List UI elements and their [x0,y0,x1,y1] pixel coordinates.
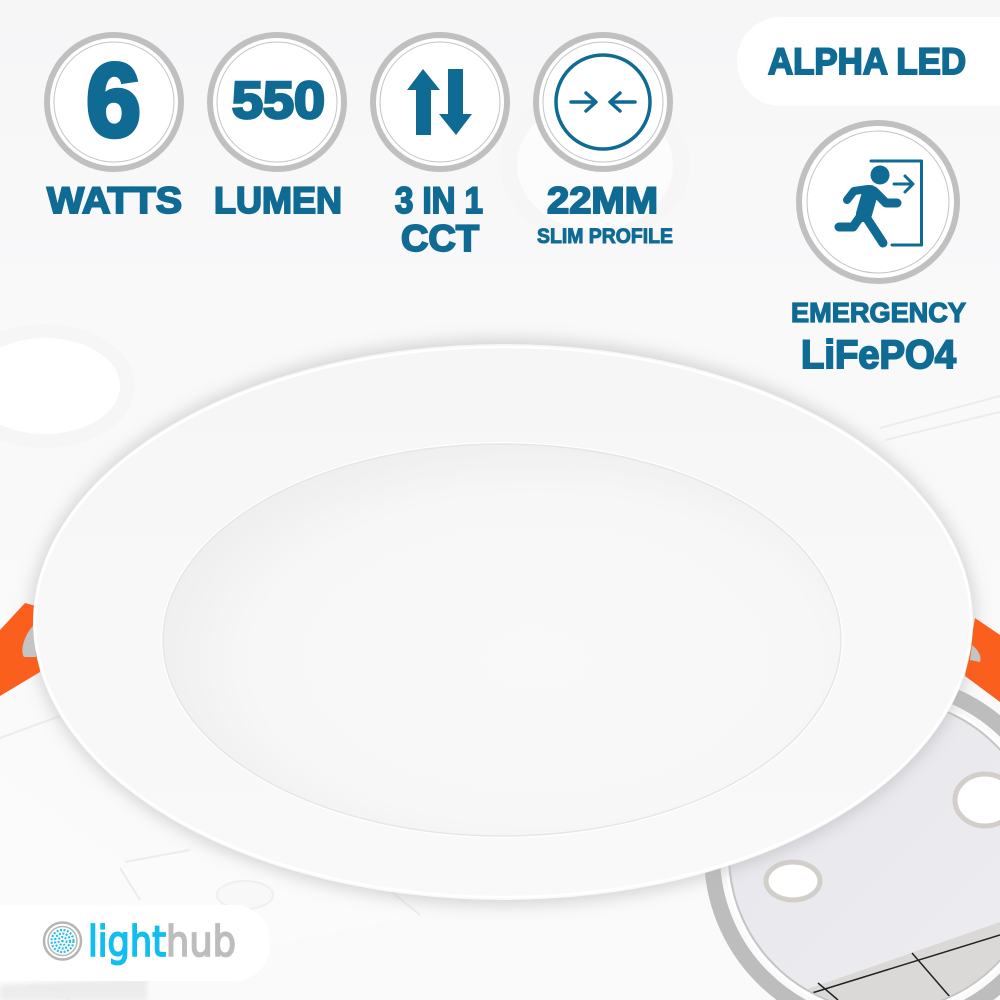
logo wordmark: hub: hub [166,917,236,966]
icon: lighthub logo mark [44,922,81,960]
label: WATTS: WATTS [47,180,182,221]
inset photo: ceiling with downlights [712,682,1000,1000]
panel drop shadow [30,339,976,905]
badge: 550 lumen: 550 [232,72,325,130]
brand pill: ALPHA LED: ALPHA LED [768,41,966,82]
icon: up and down arrows [407,69,472,135]
badge: 550 lumen [210,35,344,169]
label: LUMEN: LUMEN [214,180,342,221]
brand pill: ALPHA LED [737,17,1000,106]
badge: slim profile [536,35,670,169]
orange spring clip right [965,618,1000,702]
badge: 6 watts [47,35,181,169]
icon: inward arrows in circle [556,55,650,149]
background ceiling light left [0,324,135,448]
label: 22MM slim profile: SLIM PROFILE [537,225,673,248]
inset downlight 1 [766,862,820,900]
label: EMERGENCY LiFePO4: LiFePO4 [801,333,957,377]
orange spring clip left [0,603,40,696]
background ceiling light top [500,87,690,243]
LED panel [33,344,973,900]
label: 3 IN 1 CCT [395,180,483,259]
panel inner light face [161,442,843,838]
badge: 6 watts: 6 [86,43,141,159]
badge: emergency exit [799,123,957,281]
badge: 3 in 1 CCT arrows [373,35,507,169]
label: 22MM slim profile [537,180,673,248]
logo wordmark: light: light [88,917,166,966]
label: 22MM slim profile: 22MM [547,180,658,221]
label: 3 IN 1 CCT: 3 IN 1 [395,180,483,221]
label: 3 IN 1 CCT: CCT [401,218,479,259]
label: EMERGENCY LiFePO4 [791,297,966,377]
logo pill: lighthub [0,905,270,981]
inset downlight 2 [955,774,1000,826]
icon: person running to exit [839,161,922,245]
label: EMERGENCY LiFePO4: EMERGENCY [791,297,966,328]
